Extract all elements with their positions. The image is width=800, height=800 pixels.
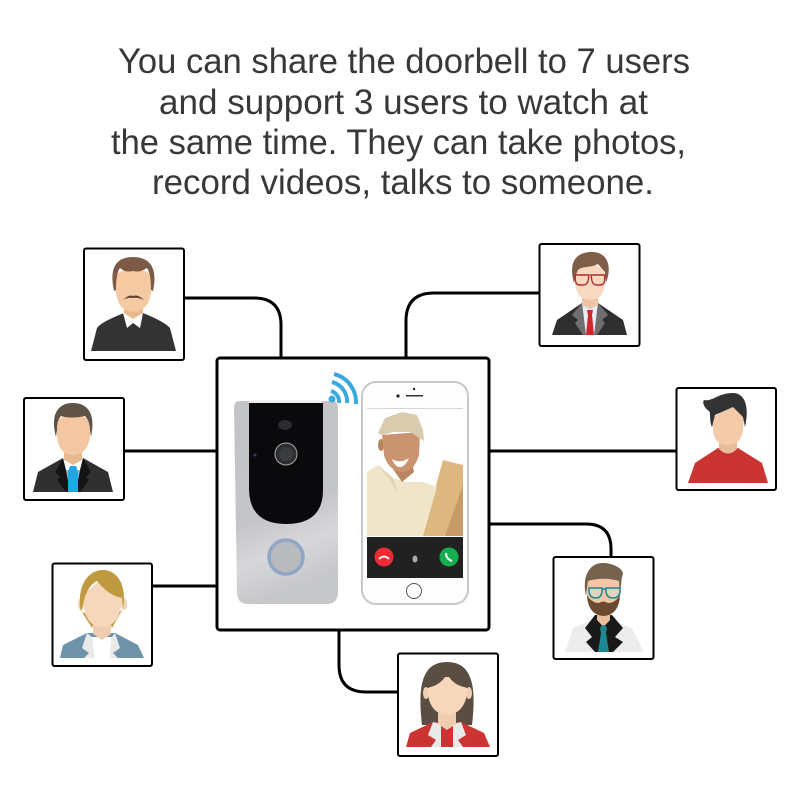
- doorbell device: [234, 401, 338, 604]
- heading text: You can share the doorbell to 7 users: [118, 41, 690, 81]
- user card: man with red glasses: [540, 244, 640, 346]
- central device panel: [217, 358, 489, 630]
- call controls bar: [367, 537, 463, 578]
- user card: bearded man with teal glasses: [554, 557, 654, 659]
- user card: man in red shirt: [676, 388, 776, 490]
- user card: man with blue tie: [24, 398, 124, 500]
- heading text: and support 3 users to watch at: [159, 82, 648, 122]
- user card: woman in red jacket: [398, 654, 498, 756]
- icon: wifi signal: [328, 374, 356, 404]
- user card: man with moustache: [84, 248, 184, 360]
- connector lines: [124, 293, 676, 692]
- heading text: record videos, talks to someone.: [152, 162, 654, 202]
- video call photo: [367, 409, 463, 537]
- user card: woman with blonde hair: [52, 564, 152, 666]
- smartphone: [362, 382, 468, 604]
- heading text: the same time. They can take photos,: [111, 122, 686, 162]
- heading text: [111, 41, 690, 202]
